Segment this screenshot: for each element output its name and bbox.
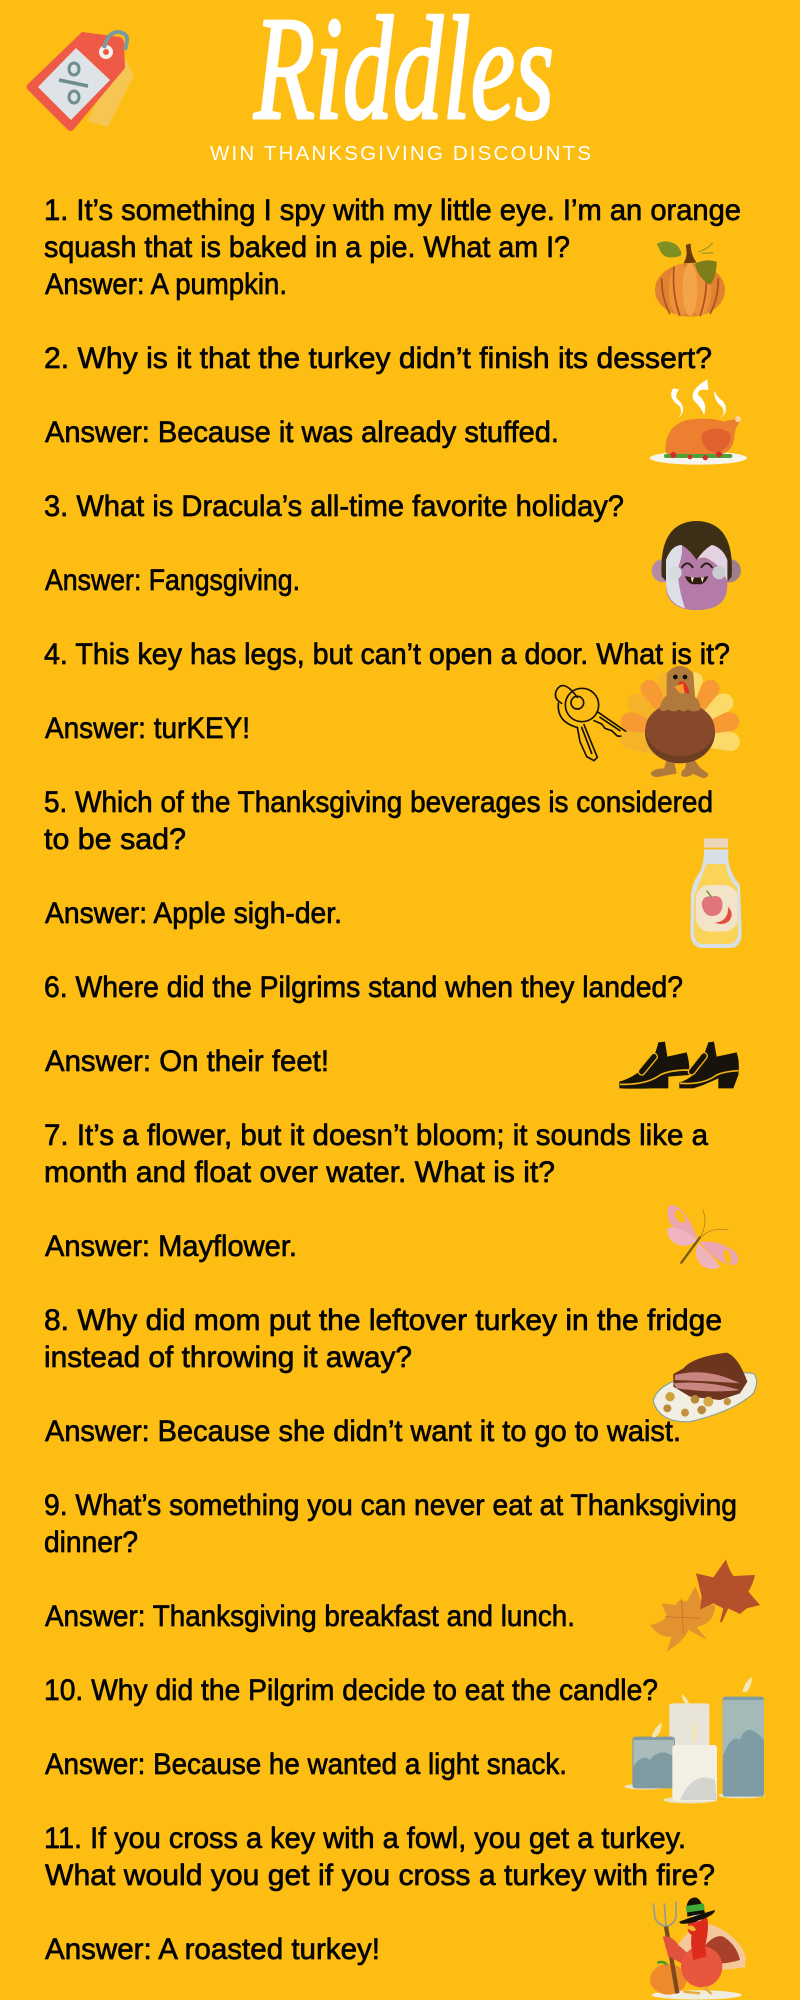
icon: apple cider bottle bbox=[690, 838, 742, 948]
icon: candles bbox=[624, 1677, 765, 1803]
riddle 11: 11. If you cross a key with a fowl, you get a turkey. bbox=[44, 1822, 686, 1855]
answer 4: Answer: turKEY! bbox=[45, 712, 250, 745]
riddle 9 bbox=[44, 1489, 737, 1633]
riddle 2: 2. Why is it that the turkey didn’t finish its dessert? bbox=[44, 342, 712, 375]
answer 6: Answer: On their feet! bbox=[45, 1045, 329, 1078]
riddle 11: What would you get if you cross a turkey with fire? bbox=[45, 1859, 715, 1892]
answer 10: Answer: Because he wanted a light snack. bbox=[45, 1748, 567, 1781]
riddle 4: 4. This key has legs, but can’t open a door. What is it? bbox=[44, 638, 730, 671]
icon: roast turkey on plate bbox=[650, 379, 747, 465]
riddle 11 bbox=[44, 1822, 715, 1966]
icon: keys bbox=[555, 686, 628, 761]
riddle 1: squash that is baked in a pie. What am I? bbox=[44, 231, 570, 264]
riddle 6 bbox=[44, 971, 683, 1078]
riddle 2 bbox=[44, 342, 712, 449]
riddle 6: 6. Where did the Pilgrims stand when they landed? bbox=[44, 971, 683, 1004]
icon: discount price tag bbox=[26, 32, 134, 131]
riddle 5 bbox=[44, 786, 713, 930]
riddle 9: 9. What’s something you can never eat at Thanksgiving bbox=[44, 1489, 737, 1522]
answer 8: Answer: Because she didn’t want it to go to waist. bbox=[45, 1415, 681, 1448]
icon: pumpkin bbox=[655, 241, 725, 317]
icon: pilgrim turkey with pitchfork bbox=[650, 1897, 746, 2000]
icon: pilgrim shoes bbox=[619, 1042, 739, 1089]
riddle 7: month and float over water. What is it? bbox=[44, 1156, 555, 1189]
answer 11: Answer: A roasted turkey! bbox=[45, 1933, 380, 1966]
riddle 5: to be sad? bbox=[44, 823, 186, 856]
riddle 1 bbox=[44, 194, 741, 301]
riddle 10: 10. Why did the Pilgrim decide to eat the candle? bbox=[44, 1674, 658, 1707]
answer 3: Answer: Fangsgiving. bbox=[45, 564, 300, 597]
riddle 9: dinner? bbox=[44, 1526, 138, 1559]
answer 7: Answer: Mayflower. bbox=[45, 1230, 297, 1263]
riddle 5: 5. Which of the Thanksgiving beverages is considered bbox=[44, 786, 713, 819]
subtitle: WIN THANKSGIVING DISCOUNTS bbox=[210, 142, 591, 165]
riddle 4 bbox=[44, 638, 730, 745]
icon: butterfly bbox=[667, 1205, 738, 1269]
riddle 3: 3. What is Dracula’s all-time favorite holiday? bbox=[44, 490, 624, 523]
riddle 7: 7. It’s a flower, but it doesn’t bloom; it sounds like a bbox=[44, 1119, 708, 1152]
riddle 8 bbox=[44, 1304, 722, 1448]
riddle 8: instead of throwing it away? bbox=[44, 1341, 412, 1374]
answer 9: Answer: Thanksgiving breakfast and lunch. bbox=[45, 1600, 575, 1633]
answer 5: Answer: Apple sigh-der. bbox=[45, 897, 342, 930]
icon: plate of sliced ham bbox=[653, 1353, 757, 1422]
riddle 1: 1. It’s something I spy with my little eye. I’m an orange bbox=[44, 194, 741, 227]
icon: autumn leaves bbox=[650, 1559, 760, 1652]
icon: vampire face bbox=[652, 521, 741, 610]
icon: cartoon turkey bbox=[630, 666, 731, 778]
riddle 8: 8. Why did mom put the leftover turkey in the fridge bbox=[44, 1304, 722, 1337]
riddle 10 bbox=[44, 1674, 658, 1781]
answer 1: Answer: A pumpkin. bbox=[45, 268, 287, 301]
riddle 7 bbox=[44, 1119, 708, 1263]
answer 2: Answer: Because it was already stuffed. bbox=[45, 416, 559, 449]
riddle 3 bbox=[44, 490, 624, 597]
